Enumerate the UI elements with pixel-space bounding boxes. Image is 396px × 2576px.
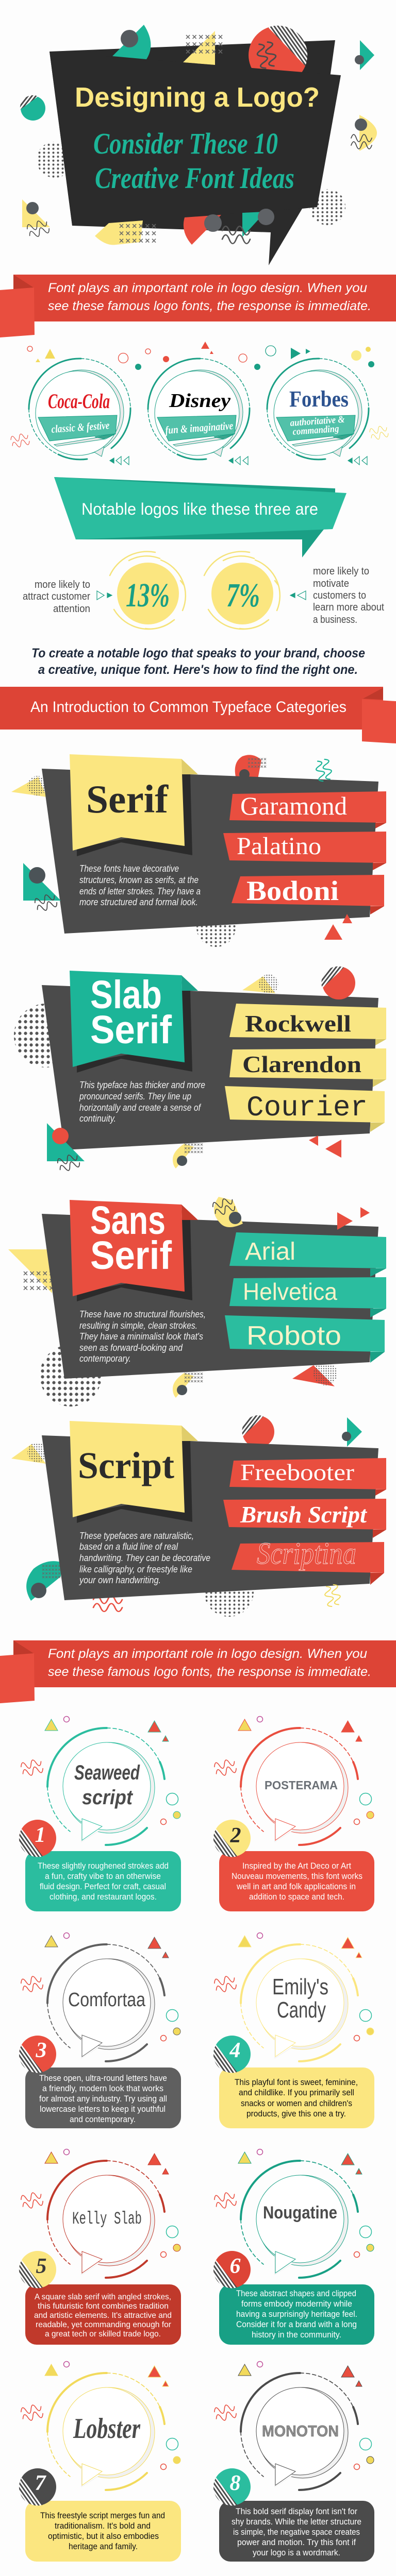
icon: yellow triangle with dots (242, 974, 278, 994)
font sample: MONOTON (262, 2422, 339, 2440)
font sample (272, 1974, 328, 2023)
heading (90, 973, 172, 1052)
ribbon: Palatino (223, 832, 386, 870)
description: based on a fluid line of real (79, 1541, 178, 1552)
banner bar (0, 687, 383, 730)
ribbon: Garamond: Garamond (240, 791, 347, 820)
bookmark fold (182, 1205, 198, 1220)
stat label: learn more about (313, 602, 384, 613)
banner bar (13, 275, 396, 321)
title line 1: Designing a Logo? (75, 82, 320, 113)
font sample: Kelly Slab (72, 2210, 142, 2229)
description (78, 1531, 210, 1585)
bookmark (70, 1200, 185, 1296)
icon: teal squiggle (314, 758, 334, 782)
ribbon: Palatino: Palatino (237, 833, 321, 860)
description (232, 2506, 361, 2557)
icon: yellow squiggle (323, 1584, 342, 1607)
ribbon label: authoritative & (290, 414, 345, 429)
call to action sentence: To create a notable logo that speaks to your brand, choose (31, 646, 365, 660)
description: These typefaces are naturalistic, (79, 1531, 194, 1541)
stat value: 7% (226, 577, 260, 614)
icon: dots circle (40, 1345, 102, 1406)
description: heritage and family. (69, 2541, 138, 2551)
number: 3 (35, 2039, 46, 2062)
ribbon: Garamond (229, 791, 386, 828)
description: These fonts have decorative (79, 863, 179, 874)
icon: teal arrow right (355, 40, 374, 70)
stat value: 13% (126, 577, 170, 614)
ribbon: Helvetica: Helvetica (243, 1278, 337, 1305)
number badge (213, 2036, 251, 2073)
description (38, 1861, 169, 1902)
number: 8 (230, 2471, 240, 2495)
ribbon: Clarendon: Clarendon (242, 1051, 361, 1077)
icon: red striped circle (249, 26, 307, 84)
icon: teal shape (242, 212, 266, 237)
bookmark fold (182, 1426, 198, 1441)
ribbon: Rockwell (229, 1004, 386, 1045)
font sample: Comfortaa (68, 1989, 146, 2011)
ribbon: Scriptina (232, 1536, 384, 1585)
icon: red waves (93, 1596, 122, 1612)
description: and contemporary. (70, 2114, 136, 2124)
ribbon: Scriptina: Scriptina (257, 1536, 356, 1570)
banner text (48, 1647, 371, 1679)
intro banner (0, 275, 396, 337)
banner bar (13, 1640, 396, 1687)
description: Consider it for a brand with a long (236, 2319, 357, 2329)
description (79, 863, 201, 907)
number: 5 (36, 2255, 46, 2278)
stat label: attention (53, 603, 90, 615)
card ring (213, 2149, 374, 2278)
description: These abstract shapes and clipped (236, 2289, 356, 2298)
arrows (97, 591, 112, 600)
Disney wordmark: Disney (169, 390, 230, 412)
banner text: see these famous logo fonts, the response is immediate. (48, 1665, 371, 1679)
icon: yellow triangle with dots (11, 776, 47, 797)
arrows (290, 591, 306, 600)
banner text: Font plays an important role in logo design. When you (48, 281, 367, 295)
description: this futuristic font combines tradition (38, 2302, 169, 2311)
ribbon: Bodoni: Bodoni (246, 875, 339, 906)
icon: red wedge (235, 755, 267, 779)
famous logos row (10, 342, 389, 465)
description box (219, 2284, 374, 2345)
description: contemporary. (79, 1353, 131, 1364)
description: is simple, the negative space creates (233, 2527, 360, 2537)
number badge (19, 2251, 56, 2288)
confetti shapes (10, 342, 389, 465)
icon: teal triangle (47, 1123, 85, 1173)
description (39, 2073, 167, 2124)
card 2: Posterama (213, 1717, 374, 1911)
icon: teal triangle (23, 863, 61, 913)
font sample: Seaweed (74, 1761, 140, 1784)
bubble front (54, 477, 346, 539)
description (232, 1861, 362, 1902)
logo card: Forbes (267, 359, 369, 460)
ribbon label: commanding (292, 423, 339, 437)
number badge (213, 1820, 251, 1857)
icon: yellow wedge (173, 1143, 204, 1168)
heading: Serif (90, 1233, 172, 1278)
banner text (48, 281, 371, 313)
title front panel (50, 52, 341, 226)
description: optimistic, but it also embodies (48, 2531, 159, 2541)
description: This bold serif display font isn't for (236, 2506, 357, 2516)
number: 4 (229, 2039, 240, 2062)
bookmark shadow (77, 774, 192, 856)
stat label: more likely to (35, 579, 90, 590)
stat label: attract customer (23, 591, 90, 602)
bookmark shadow (77, 991, 192, 1073)
section banner: typeface categories (0, 687, 396, 743)
banner fold (13, 275, 34, 290)
description: a fun, crafty vibe to an otherwise (45, 1871, 161, 1881)
font sample (74, 1761, 140, 1809)
description: a great tech or skilled trade logo. (45, 2330, 161, 2338)
number badge (213, 2251, 251, 2288)
title line 3: Creative Font Ideas (95, 161, 294, 195)
icon: dots circle (14, 1004, 78, 1067)
number: 7 (35, 2471, 46, 2495)
icon: red striped circle (321, 967, 355, 999)
description: your logo is a wordmark. (253, 2548, 340, 2557)
icon: yellow triangle with crosses (183, 31, 224, 65)
description (34, 2293, 172, 2338)
description: well in art and folk applications in (236, 1882, 356, 1891)
bookmark shadow (77, 1441, 192, 1523)
ribbon label: classic & festive (51, 419, 110, 435)
title speech bubble back (50, 40, 335, 265)
bookmark fold (182, 975, 198, 991)
logo ring (148, 359, 250, 460)
description: readable, yet commanding enough for (36, 2320, 172, 2329)
panel background (42, 1435, 378, 1600)
ribbon: Helvetica (229, 1277, 386, 1317)
description: horizontally and create a sense of (79, 1103, 202, 1113)
ribbon: Courier (225, 1086, 385, 1132)
stat circle (211, 563, 273, 624)
description: a friendly, modern look that works (42, 2083, 163, 2093)
stat: 13% (23, 552, 186, 629)
logo ring (29, 359, 130, 460)
ribbon: Arial (229, 1232, 386, 1277)
heading: Serif (86, 777, 169, 821)
description (235, 2077, 358, 2119)
font sample: Nougatine (263, 2203, 337, 2223)
card 1: Seaweed script (19, 1717, 181, 1911)
card ring (213, 2362, 374, 2490)
bookmark (70, 1421, 185, 1517)
number: 1 (35, 1823, 45, 1847)
icon: red triangles (324, 914, 352, 940)
panel: Script (11, 1415, 386, 1617)
description: seen as forward-looking and (79, 1343, 183, 1353)
icon: right dot circle (309, 189, 345, 225)
description: clothing, and restaurant logos. (50, 1892, 157, 1902)
card 5: Kelly Slab (19, 2149, 181, 2345)
icon: red wedge (184, 215, 221, 245)
grey dots over bottom edge (204, 209, 274, 232)
description: and childlike. If you primarily sell (239, 2088, 354, 2097)
description: and artistic elements. It's attractive and (34, 2311, 172, 2320)
stat label: motivate (313, 578, 349, 589)
panel background (42, 985, 378, 1150)
description: snacks or women and children's (241, 2098, 352, 2108)
number badge (213, 2468, 251, 2505)
card ring (20, 1717, 180, 1845)
description: addition to space and tech. (249, 1892, 344, 1902)
description: Nouveau movements, this font works (232, 1871, 362, 1881)
description: shy brands. While the letter structure (232, 2517, 361, 2527)
description: having a surprisingly heritage feel. (236, 2309, 357, 2319)
description (40, 2511, 165, 2551)
stat label (313, 566, 384, 625)
ribbon label (290, 414, 345, 437)
bubble text: Notable logos like these three are (81, 500, 318, 518)
description: resulting in simple, clean strokes. (79, 1320, 197, 1331)
description: fluid design. Perfect for craft, casual (40, 1882, 166, 1891)
icon: teal striped circle (20, 95, 45, 121)
icon: left dot circle (37, 142, 73, 178)
icon: yellow half circle (351, 115, 377, 151)
font sample: Candy (277, 1997, 326, 2023)
description: traditionalism. It's bold and (55, 2521, 151, 2531)
heading: Slab (90, 973, 162, 1017)
description: They have a minimalist look that's (79, 1331, 203, 1342)
banner fold (13, 1640, 34, 1656)
font sample: Lobster (73, 2413, 141, 2445)
font sample: POSTERAMA (265, 1778, 338, 1792)
logo card: Coca-Cola (29, 359, 130, 460)
banner fold (363, 688, 383, 700)
number: 6 (230, 2255, 240, 2278)
icon: yellow triangle lower left (22, 199, 51, 239)
heading: Sans (90, 1198, 166, 1243)
Forbes wordmark: Forbes (289, 386, 349, 412)
description: This freestyle script merges fun and (40, 2511, 165, 2520)
number badge (19, 2468, 56, 2505)
bookmark shadow (77, 1219, 192, 1301)
description: handwriting. They can be decorative (79, 1553, 210, 1563)
description: These open, ultra-round letters have (39, 2073, 167, 2083)
icon: teal arrow (342, 1417, 362, 1447)
card 8: Monoton (213, 2362, 374, 2562)
ribbon: Roboto: Roboto (246, 1321, 341, 1351)
description box (25, 1851, 181, 1911)
description: Inspired by the Art Deco or Art (242, 1861, 351, 1871)
stats (23, 552, 384, 629)
panel background (42, 1214, 378, 1379)
call to action sentence: a creative, unique font. Here's how to find the right one. (38, 663, 358, 677)
description: This playful font is sweet, feminine, (235, 2077, 358, 2087)
font ideas banner (0, 1640, 396, 1703)
ribbon: Clarendon (229, 1048, 386, 1087)
banner flap (0, 1653, 35, 1703)
ribbon: Brush Script: Brush Script (240, 1501, 367, 1528)
icon: teal wedge (112, 25, 151, 59)
bubble back (54, 477, 335, 557)
description box (219, 1851, 374, 1911)
description: like calligraphy, or freestyle like (79, 1564, 192, 1574)
card 6: Nougatine (213, 2149, 374, 2345)
stat label: a business. (313, 614, 357, 625)
number badge (19, 1820, 56, 1857)
description: forms embody modernity while (241, 2299, 352, 2309)
ribbon: Roboto (225, 1315, 385, 1363)
ribbon: Courier: Courier (246, 1091, 368, 1124)
panel: Serif (11, 754, 386, 947)
banner flap (362, 699, 396, 743)
card 7: Lobster (19, 2362, 181, 2562)
card ring (20, 1933, 180, 2061)
logo ring (267, 359, 369, 460)
heading: Serif (90, 1008, 172, 1052)
stat label (23, 579, 90, 615)
card ring (20, 2362, 180, 2490)
description: This typeface has thicker and more (79, 1080, 205, 1090)
heading (90, 1198, 172, 1278)
description (79, 1080, 205, 1124)
icon: red triangles (309, 1136, 341, 1158)
description: continuity. (79, 1113, 116, 1124)
icon: yellow triangle with crosses (8, 1249, 62, 1293)
description (79, 1309, 206, 1364)
panel background (42, 769, 378, 934)
heading: Script (78, 1445, 174, 1486)
logo card: Disney (148, 359, 250, 460)
description box (219, 2501, 374, 2562)
title line 2: Consider These 10 (93, 127, 278, 160)
card 3: Comfortaa (19, 1933, 181, 2128)
card ring (213, 1933, 374, 2061)
ribbon: Freebooter: Freebooter (240, 1459, 354, 1485)
icon: red striped circle (242, 1415, 274, 1448)
description box (219, 2067, 374, 2128)
font sample: Emily's (272, 1974, 328, 1999)
stat label: more likely to (313, 566, 369, 577)
description: These have no structural flourishes, (79, 1309, 206, 1319)
description: products, give this one a try. (246, 2109, 346, 2119)
notable logos bubble (54, 477, 346, 557)
icon: teal wedge (26, 1561, 61, 1601)
description: more structured and formal look. (79, 897, 198, 907)
description (236, 2289, 357, 2340)
icon: dark waves (222, 226, 250, 244)
stat rings (110, 552, 186, 629)
ribbon: Rockwell: Rockwell (245, 1010, 351, 1037)
icon: dots circle (196, 908, 236, 947)
bookmark (70, 971, 185, 1067)
banner text: see these famous logo fonts, the response is immediate. (48, 299, 371, 313)
panel: Sans Serif (8, 1196, 386, 1406)
description: These slightly roughened strokes add (38, 1861, 169, 1871)
icon: yellow wedge (173, 1372, 204, 1398)
description box (25, 2067, 181, 2128)
description: A square slab serif with angled strokes, (35, 2293, 171, 2301)
ribbon: Bodoni (232, 875, 384, 914)
card ring (20, 2149, 180, 2278)
icon: yellow crescent (211, 1196, 243, 1227)
description: ends of letter strokes. They have a (79, 886, 201, 896)
description: for almost any industry. Try using all (39, 2094, 167, 2104)
icon: yellow triangle with dots (11, 1443, 47, 1464)
stat: 7% (204, 552, 384, 629)
ribbon: Arial: Arial (245, 1238, 295, 1265)
panel: Slab Serif (14, 967, 386, 1173)
font sample: script (82, 1786, 134, 1809)
icon: yellow wedge with crosses (95, 221, 158, 245)
description: structures, known as serifs, at the (79, 875, 199, 885)
icon: red arrows (337, 1207, 370, 1230)
bookmark fold (182, 759, 198, 774)
banner flap (0, 287, 35, 337)
icon: red triangle with dots (292, 1362, 337, 1386)
title panel (20, 25, 377, 265)
number: 2 (230, 1824, 241, 1848)
description: your own handwriting. (78, 1575, 161, 1585)
card 4: Emily's Candy (213, 1933, 374, 2128)
description: pronounced serifs. They line up (79, 1091, 191, 1101)
bookmark (70, 754, 185, 851)
description box (25, 2284, 181, 2345)
description: power and motion. Try this font if (237, 2537, 356, 2547)
card ring (213, 1717, 374, 1845)
ribbon: Freebooter (229, 1458, 386, 1496)
stat rings (204, 552, 280, 629)
banner heading: An Introduction to Common Typeface Categories (30, 699, 346, 716)
description: lowercase letters to keep it youthful (40, 2104, 166, 2114)
Coca-Cola wordmark: Coca-Cola (48, 389, 110, 413)
description box (25, 2501, 181, 2562)
call to action sentence (31, 646, 365, 677)
ribbon label: fun & imaginative (165, 419, 234, 436)
description: history in the community. (252, 2330, 341, 2340)
banner text: Font plays an important role in logo design. When you (48, 1647, 367, 1661)
ribbon: Brush Script (223, 1499, 386, 1538)
number badge (19, 2036, 56, 2073)
icon: dots circle (204, 1567, 254, 1617)
stat label: customers to (313, 590, 366, 601)
stat circle (117, 563, 179, 624)
